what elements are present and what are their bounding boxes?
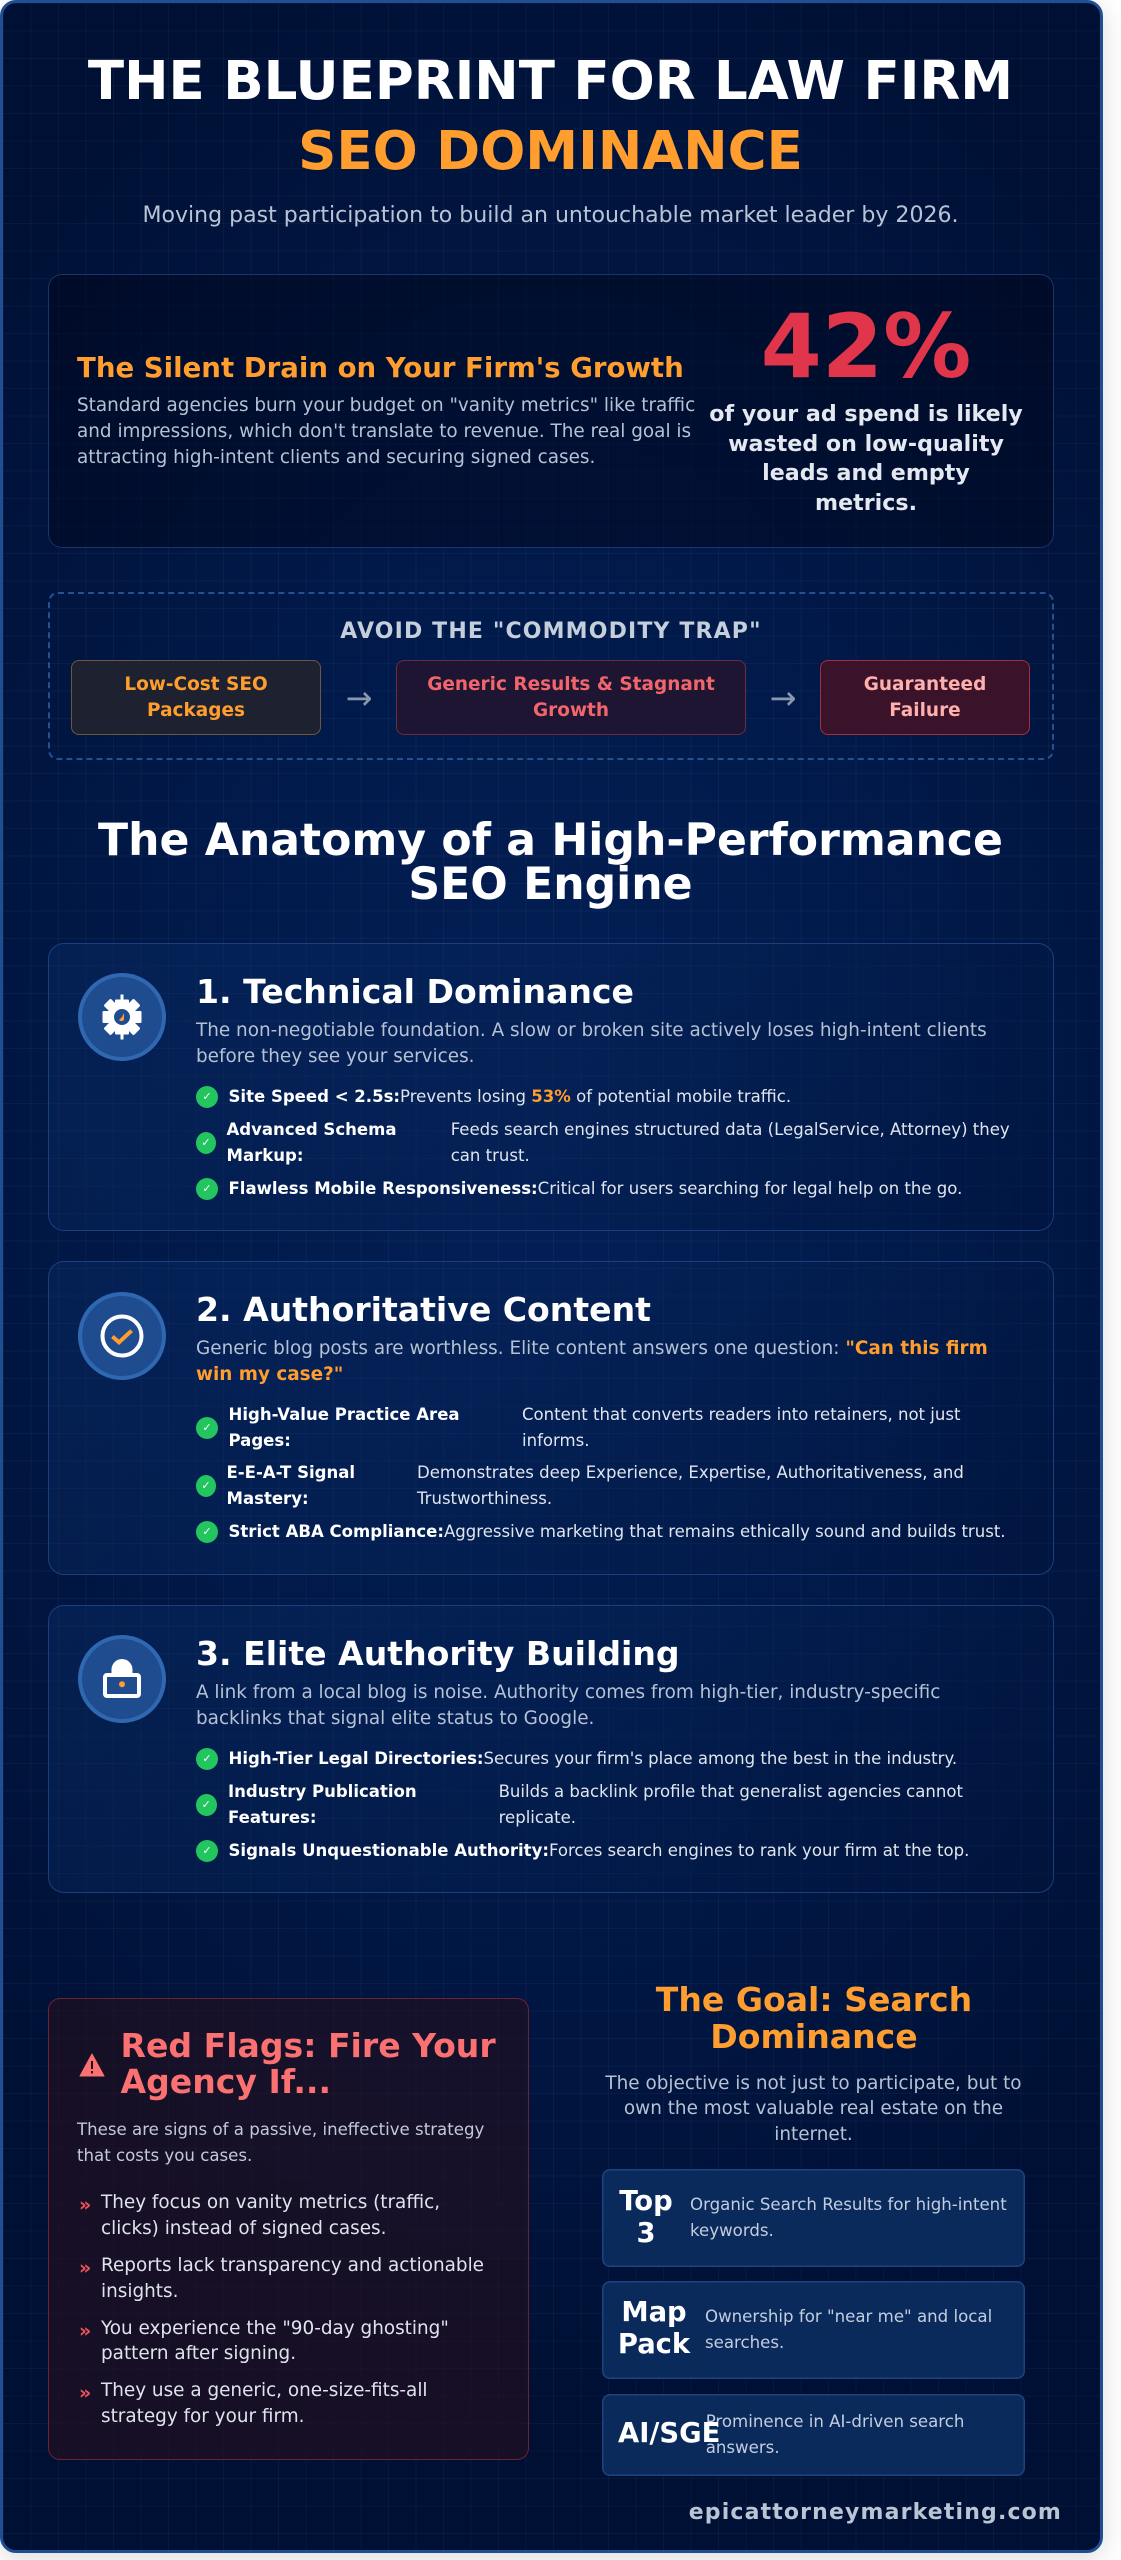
panel: elite authority building — [48, 1605, 1054, 1893]
title: SEO DOMINANCE — [298, 120, 803, 182]
red flag item 4 — [79, 2380, 428, 2427]
red flag item 1: clicks) instead of signed cases. — [101, 2218, 386, 2239]
text: red flags intro: These are signs of a passive, ineffective strategy — [77, 2120, 484, 2139]
text: goal intro: own the most valuable real estate on the — [624, 2098, 1003, 2119]
description: Generic blog posts are worthless. Elite content answers one question: "Can this firm — [196, 1338, 988, 1359]
list item: practice area pages: ✓ — [202, 1420, 212, 1434]
red flag item 3: You experience the "90-day ghosting" — [101, 2318, 449, 2339]
list item: practice area pages: Content that converts readers into retainers, not just — [522, 1404, 960, 1424]
section heading: anatomy: The Anatomy of a High-Performance — [98, 815, 1003, 866]
heading: red flags: Agency If... — [120, 2062, 331, 2101]
description: answers. — [706, 2438, 780, 2457]
heading: the goal: The Goal: Search — [656, 1980, 972, 2018]
heading: red flags: Red Flags: Fire Your — [120, 2026, 496, 2064]
list item: legal directories: High-Tier Legal Directories:Secures your firm's place among the best in the industry. — [228, 1749, 957, 1768]
label — [619, 2186, 673, 2249]
text: silent drain explanation — [77, 395, 695, 468]
list item: schema markup: can trust. — [451, 1146, 530, 1165]
list item: schema markup: ✓ — [201, 1136, 211, 1149]
list item: E-E-A-T: E-E-A-T Signal — [226, 1463, 355, 1482]
list item: legal directories: ✓ — [202, 1752, 212, 1765]
description — [196, 1682, 940, 1728]
red flag item 1 — [79, 2192, 440, 2239]
heading: 2. Authoritative Content — [196, 1290, 651, 1329]
red flag item 4: strategy for your firm. — [101, 2406, 304, 2427]
list item: publication features — [196, 1782, 963, 1827]
flow step: low-cost packages — [71, 660, 321, 735]
text: silent drain explanation: and impressions, which don't translate to revenue. The real goal is — [77, 421, 691, 442]
heading: the goal — [656, 1980, 972, 2056]
flow step: guaranteed failure: Failure — [889, 700, 961, 721]
label: Top — [619, 2186, 673, 2217]
title — [88, 50, 1013, 182]
text: goal intro — [605, 2072, 1022, 2145]
list item: publication features: Builds a backlink profile that generalist agencies cannot — [499, 1782, 963, 1801]
text: red flags intro — [76, 2120, 484, 2164]
goal card: AI/SGE — [602, 2394, 1025, 2476]
flow step: generic results — [396, 660, 746, 735]
footer: website: epicattorneymarketing.com — [689, 2500, 1062, 2525]
list item: site speed: ✓ — [202, 1090, 212, 1103]
description — [706, 2412, 964, 2457]
list item: publication features: Features: — [228, 1808, 316, 1827]
description — [196, 1338, 988, 1384]
flow step: low-cost packages: Packages — [147, 700, 245, 721]
label: AI/SGE — [618, 2418, 720, 2449]
label: Pack — [618, 2329, 690, 2360]
red flag item 1: They focus on vanity metrics (traffic, — [101, 2192, 440, 2213]
label: 3 — [636, 2218, 656, 2249]
list item: unquestionable authority: ✓ — [202, 1844, 212, 1857]
flow step: generic results: Generic Results & Stagnant — [427, 674, 715, 694]
red flag item 2: Reports lack transparency and actionable — [101, 2255, 484, 2276]
description: Ownership for "near me" and local — [705, 2307, 992, 2326]
stat caption: leads and empty — [762, 460, 970, 486]
description: backlinks that signal elite status to Google. — [196, 1708, 594, 1728]
text: goal intro: The objective is not just to participate, but to — [605, 2072, 1022, 2094]
red flag item 3: pattern after signing. — [101, 2343, 296, 2364]
list item: schema markup: Advanced Schema — [226, 1120, 396, 1139]
stat caption: metrics. — [815, 490, 917, 516]
text: silent drain explanation: Standard agencies burn your budget on "vanity metrics" like traffic — [77, 395, 695, 416]
flow step: generic results: Growth — [533, 700, 609, 721]
heading: red flags — [120, 2026, 496, 2101]
list item: practice area pages — [196, 1404, 960, 1450]
red flag item 3: » — [79, 2320, 91, 2342]
stat caption: of your ad spend is likely — [709, 401, 1023, 427]
list item: E-E-A-T — [196, 1463, 964, 1508]
stat caption: wasted on low-quality — [728, 431, 1004, 457]
heading: silent drain: The Silent Drain on Your Firm's Growth — [77, 351, 684, 384]
panel: commodity trap — [48, 592, 1054, 760]
list item: mobile responsiveness: ✓ — [202, 1182, 212, 1195]
label: Map — [621, 2297, 687, 2328]
description — [196, 1020, 987, 1066]
red flag item 2 — [79, 2255, 484, 2302]
list item: schema markup — [196, 1120, 1010, 1165]
text: red flags intro: that costs you cases. — [77, 2146, 252, 2164]
list item: publication features: ✓ — [202, 1798, 211, 1811]
list item: practice area pages: informs. — [522, 1430, 589, 1450]
description: before they see your services. — [196, 1046, 474, 1066]
panel: authoritative content — [48, 1261, 1054, 1575]
stat: 42 percent: 42% — [761, 295, 971, 398]
panel: silent drain — [48, 274, 1054, 548]
text: goal intro: internet. — [774, 2124, 853, 2145]
list item: ABA compliance: Strict ABA Compliance:Aggressive marketing that remains ethically sound and builds trust. — [228, 1522, 1006, 1541]
red flag item 1: » — [79, 2194, 91, 2216]
section heading: anatomy: SEO Engine — [408, 859, 693, 910]
description: The non-negotiable foundation. A slow or broken site actively loses high-intent clients — [196, 1020, 987, 1041]
list item: E-E-A-T: Demonstrates deep Experience, Expertise, Authoritativeness, and — [417, 1463, 964, 1482]
icon: warning triangle — [80, 2054, 104, 2076]
description: Organic Search Results for high-intent — [690, 2195, 1007, 2214]
list item: practice area pages: Pages: — [228, 1430, 291, 1450]
title: THE BLUEPRINT FOR LAW FIRM — [88, 50, 1013, 112]
description: A link from a local blog is noise. Authority comes from high-tier, industry-specific — [196, 1682, 940, 1703]
description: win my case?" — [196, 1364, 343, 1384]
red flag item 3 — [79, 2318, 449, 2364]
list item: ABA compliance: ✓ — [202, 1525, 212, 1538]
list item: publication features: Industry Publication — [228, 1782, 417, 1801]
heading: commodity trap: AVOID THE "COMMODITY TRAP" — [340, 618, 762, 644]
flow step: guaranteed failure: Guaranteed — [864, 674, 986, 694]
heading: 3. Elite Authority Building — [196, 1634, 680, 1673]
icon: lock — [78, 1635, 166, 1723]
list item: schema markup: Feeds search engines structured data (LegalService, Attorney) they — [451, 1120, 1010, 1139]
arrow: → — [770, 679, 796, 717]
panel: red flags — [48, 1998, 529, 2460]
stat caption — [709, 401, 1023, 516]
list item: schema markup: Markup: — [226, 1146, 303, 1165]
heading: the goal: Dominance — [710, 2016, 918, 2056]
panel: technical dominance — [48, 943, 1054, 1231]
description — [705, 2307, 992, 2352]
icon: check badge — [78, 1292, 166, 1380]
description: keywords. — [690, 2221, 774, 2240]
subtitle: Moving past participation to build an untouchable market leader by 2026. — [142, 203, 959, 228]
flow step: guaranteed failure — [820, 660, 1030, 735]
arrow: → — [346, 679, 372, 717]
section heading: anatomy — [98, 815, 1003, 910]
description: Prominence in AI-driven search — [706, 2412, 964, 2431]
list item: unquestionable authority: Signals Unquestionable Authority:Forces search engines to rank your firm at the top. — [228, 1841, 969, 1860]
list item: publication features: replicate. — [499, 1808, 576, 1827]
description: searches. — [705, 2333, 784, 2352]
label — [618, 2297, 691, 2360]
red flag item 4: » — [79, 2382, 91, 2404]
heading: 1. Technical Dominance — [196, 972, 634, 1011]
red flag item 4: They use a generic, one-size-fits-all — [101, 2380, 428, 2401]
list item: practice area pages: High-Value Practice Area — [228, 1404, 460, 1424]
list item: mobile responsiveness: Flawless Mobile Responsiveness:Critical for users searching for legal help on the go. — [228, 1179, 962, 1198]
goal card: map pack — [602, 2281, 1025, 2379]
list item: E-E-A-T: Mastery: — [226, 1489, 309, 1508]
list item: E-E-A-T: ✓ — [201, 1479, 211, 1492]
red flag item 2: insights. — [101, 2281, 178, 2302]
text: silent drain explanation: attracting high-intent clients and securing signed cases. — [77, 447, 595, 468]
list item: E-E-A-T: Trustworthiness. — [417, 1489, 552, 1508]
icon: gear — [78, 973, 166, 1061]
goal card: top 3 — [602, 2169, 1025, 2266]
red flag item 2: » — [79, 2257, 91, 2279]
description — [690, 2195, 1007, 2240]
list item: site speed: Site Speed < 2.5s:Prevents losing 53% of potential mobile traffic. — [228, 1087, 791, 1106]
flow step: low-cost packages: Low-Cost SEO — [124, 674, 268, 694]
